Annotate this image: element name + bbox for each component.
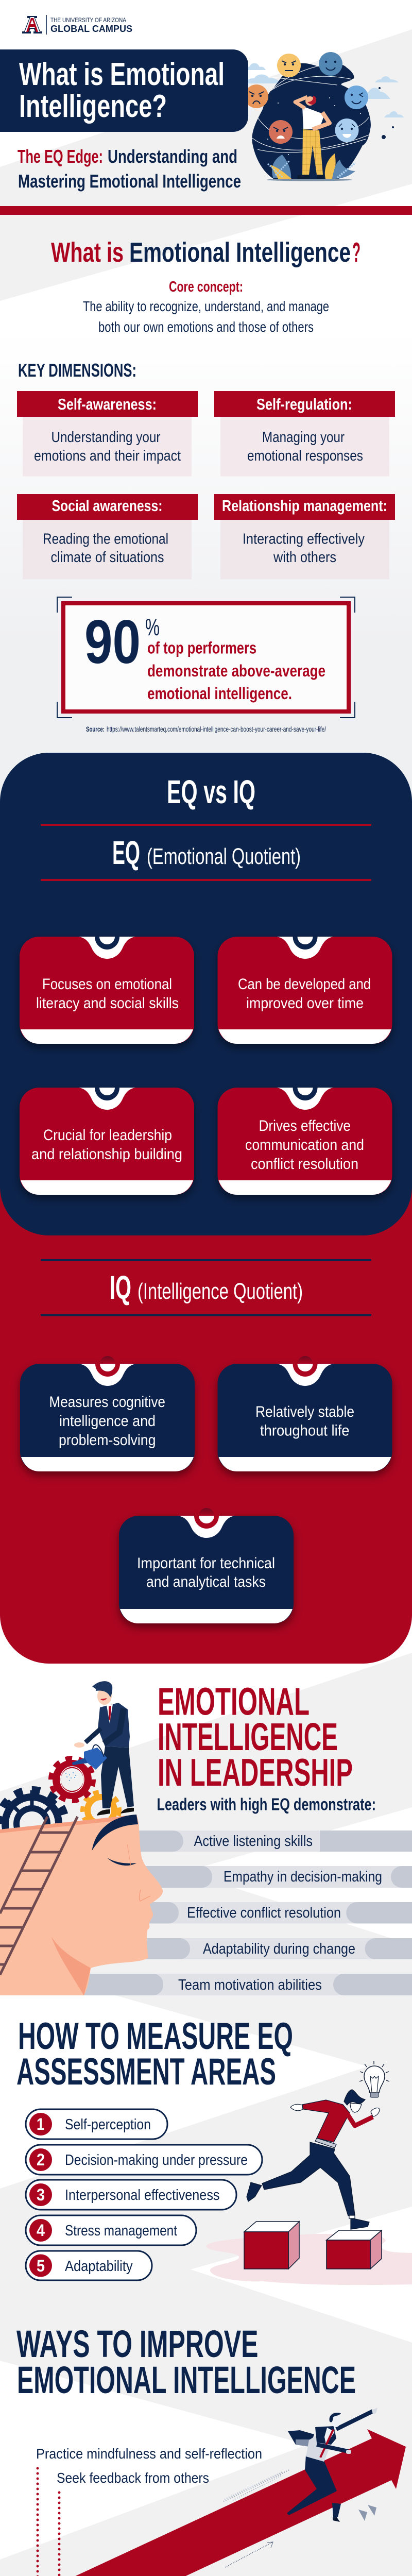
heading: ways to improve: WAYS TO IMPROVE [16, 2323, 259, 2365]
ways list text [36, 2446, 395, 2576]
card: focuses on emotional literacy: literacy and social skills [36, 995, 179, 1012]
bar: adaptability: Adaptability during change [203, 1941, 355, 1957]
face: orange sad [245, 84, 268, 108]
card: relationship management: with others [273, 549, 336, 566]
card: measures cognitive intelligence: Measures cognitive [49, 1394, 165, 1411]
card: self-regulation [214, 391, 395, 476]
item 3 [26, 2180, 236, 2210]
item 2 [26, 2145, 262, 2175]
title banner: Intelligence? [19, 89, 167, 124]
core concept text: Core concept: [169, 279, 243, 295]
ground shadow [267, 178, 352, 181]
faces [245, 52, 368, 144]
item 1: 1 [37, 2115, 44, 2133]
heading: how to measure EQ: ASSESSMENT AREAS [16, 2051, 276, 2093]
logo: University of Arizona Global Campus: THE UNIVERSITY OF ARIZONA [50, 16, 126, 24]
card: relatively stable: Relatively stable [255, 1403, 354, 1420]
runner [247, 2090, 380, 2229]
icon: red gear [51, 1758, 93, 1801]
panel: IQ red background [0, 1185, 412, 1664]
bar: conflict resolution [52, 1902, 412, 1924]
card: relationship management [214, 494, 395, 579]
item 3: 3 [37, 2185, 45, 2204]
heading: EQ emotional quotient [41, 824, 371, 881]
heading: EQ emotional quotient: (Emotional Quotient) [147, 844, 301, 869]
swirl lines [252, 63, 369, 152]
icon: block A [22, 16, 42, 33]
heading: EQ vs IQ: EQ vs IQ [167, 773, 255, 810]
card: can be developed [217, 937, 392, 1044]
heading: how to measure EQ [16, 2015, 293, 2093]
item 5 [26, 2251, 152, 2280]
ladder [0, 1817, 77, 1975]
subtitle [18, 146, 241, 192]
illustration: gears, head and leader watering [0, 1681, 163, 1995]
heading: What is Emotional Intelligence [51, 237, 360, 268]
bar: active listening [52, 1831, 412, 1852]
text: ? [352, 237, 360, 268]
callout: 90 percent statistic: of top performers [147, 639, 256, 657]
icon: lightbulb [359, 2061, 389, 2097]
illustration: runner with lightbulb and boxes [206, 2061, 412, 2285]
subtitle: Understanding and [108, 146, 237, 167]
card: can be developed: Can be developed and [238, 976, 371, 993]
title banner: What is Emotional [19, 57, 225, 92]
leader figure [72, 1681, 134, 1816]
head profile [0, 1815, 163, 1995]
card: self-awareness [17, 391, 198, 476]
face: yellow annoyed [277, 54, 301, 77]
man [295, 96, 330, 179]
speed trails [224, 2469, 290, 2567]
item 1: Self-perception [65, 2116, 151, 2133]
heading: ways to improve [16, 2323, 356, 2401]
icon: navy gear [0, 1790, 65, 1857]
illustration: businessman riding arrow [287, 2408, 377, 2522]
ways list text: Practice mindfulness and self-reflection [36, 2446, 262, 2462]
face: red angry [269, 120, 293, 144]
subtitle: Mastering Emotional Intelligence [18, 171, 241, 192]
title banner [0, 49, 248, 132]
bar: adaptability [52, 1938, 412, 1959]
card: focuses on emotional literacy: Focuses on emotional [42, 976, 172, 993]
card: social awareness [17, 494, 198, 579]
callout: 90 percent statistic: demonstrate above-average [147, 662, 325, 680]
bar: empathy: Empathy in decision-making [224, 1869, 382, 1885]
face: pale blue happy [335, 118, 358, 142]
card: crucial for leadership: and relationship building [31, 1146, 182, 1163]
bar: team motivation [52, 1974, 412, 1995]
card: drives effective communication [217, 1088, 392, 1195]
item 2: Decision-making under pressure [65, 2152, 248, 2168]
item 5: Adaptability [65, 2258, 133, 2275]
item 4 [26, 2215, 196, 2245]
card: drives effective communication: Drives effective [259, 1117, 351, 1134]
card: focuses on emotional literacy [20, 937, 194, 1044]
heading: emotional intelligence in leadership [157, 1680, 376, 1814]
bar: empathy [52, 1866, 412, 1888]
core concept text [83, 279, 329, 335]
hero illustration: man surrounded by emotion faces [242, 52, 404, 181]
card: self-regulation: Self-regulation: [256, 395, 352, 413]
card: crucial for leadership [20, 1088, 194, 1195]
callout: 90 percent statistic [57, 597, 355, 718]
card: measures cognitive intelligence: problem-solving [59, 1432, 156, 1449]
card: crucial for leadership: Crucial for leadership [43, 1127, 172, 1144]
card: measures cognitive intelligence: intelligence and [59, 1413, 156, 1430]
card: important for technical tasks: Important for technical [137, 1555, 275, 1572]
subtitle: The EQ Edge: [18, 146, 103, 167]
item 2: 2 [37, 2150, 45, 2169]
heading: EQ emotional quotient: EQ [112, 834, 140, 871]
card: social awareness: climate of situations [50, 549, 164, 566]
card: measures cognitive intelligence [20, 1355, 195, 1471]
logo: University of Arizona Global Campus [22, 15, 132, 35]
logo: University of Arizona Global Campus: GLOBAL CAMPUS [50, 24, 132, 34]
card: self-regulation: emotional responses [247, 448, 363, 464]
heading: emotional intelligence in leadership: EMOTIONAL [158, 1680, 310, 1723]
source line: https://www.talentsmarteq.com/emotional-intelligence-can-boost-your-career-and-save-your-life/ [107, 725, 326, 733]
card: drives effective communication: communication and [245, 1137, 364, 1154]
bar: conflict resolution: Effective conflict resolution [187, 1905, 341, 1921]
card: relatively stable [217, 1355, 392, 1471]
card: important for technical tasks: and analytical tasks [146, 1573, 266, 1590]
card: relationship management: Interacting effectively [243, 531, 365, 547]
arrow: rising red arrow [0, 2429, 406, 2576]
face: blue smile [319, 52, 342, 76]
card: can be developed: improved over time [246, 995, 364, 1012]
icon: orange gear [82, 1792, 119, 1829]
callout: 90 percent statistic: emotional intelligence. [147, 684, 292, 703]
ways list text: Seek feedback from others [57, 2470, 209, 2486]
item 1 [26, 2109, 167, 2139]
card: self-awareness: Understanding your [52, 429, 161, 446]
dotted connectors [38, 2468, 176, 2576]
hair and eye [92, 1815, 138, 1851]
core concept text: both our own emotions and those of others [98, 319, 314, 335]
item 4: 4 [37, 2221, 45, 2240]
blob [252, 63, 371, 179]
face: winking [345, 86, 368, 109]
item 3: Interpersonal effectiveness [65, 2187, 219, 2204]
clouds [242, 63, 404, 117]
card: self-awareness: emotions and their impact [34, 448, 181, 464]
bar: team motivation: Team motivation abilities [178, 1977, 322, 1993]
source line: Source: [86, 725, 105, 733]
callout: 90 percent statistic: 90 [84, 607, 141, 676]
core concept text: The ability to recognize, understand, and manage [83, 298, 329, 314]
card: drives effective communication: conflict resolution [251, 1156, 358, 1173]
list: assessment areas [26, 2109, 262, 2280]
card: relatively stable: throughout life [260, 1422, 349, 1439]
triangles [358, 2505, 376, 2521]
heading: IQ intelligence quotient: (Intelligence Quotient) [138, 1279, 303, 1304]
list: leadership traits bars [52, 1831, 412, 1995]
card: self-regulation: Managing your [262, 429, 345, 446]
box left [244, 2222, 299, 2269]
card: social awareness: Social awareness: [52, 497, 163, 515]
card: important for technical tasks [119, 1507, 294, 1623]
source line [86, 725, 326, 733]
card: social awareness: Reading the emotional [43, 531, 168, 547]
panel: EQ navy background [0, 753, 412, 1235]
bar: active listening: Active listening skills [194, 1833, 313, 1850]
plants [268, 154, 355, 179]
callout: 90 percent statistic: % [145, 614, 160, 640]
heading: IQ intelligence quotient: IQ [110, 1269, 131, 1306]
box right [327, 2230, 382, 2269]
heading: key dimensions: KEY DIMENSIONS: [18, 360, 136, 381]
heading: IQ intelligence quotient [41, 1259, 371, 1316]
item 5: 5 [37, 2257, 45, 2275]
item 4: Stress management [65, 2223, 177, 2239]
card: self-awareness: Self-awareness: [58, 395, 157, 413]
heading: What is Emotional Intelligence: What is [51, 237, 124, 268]
floor blob [206, 2234, 412, 2285]
